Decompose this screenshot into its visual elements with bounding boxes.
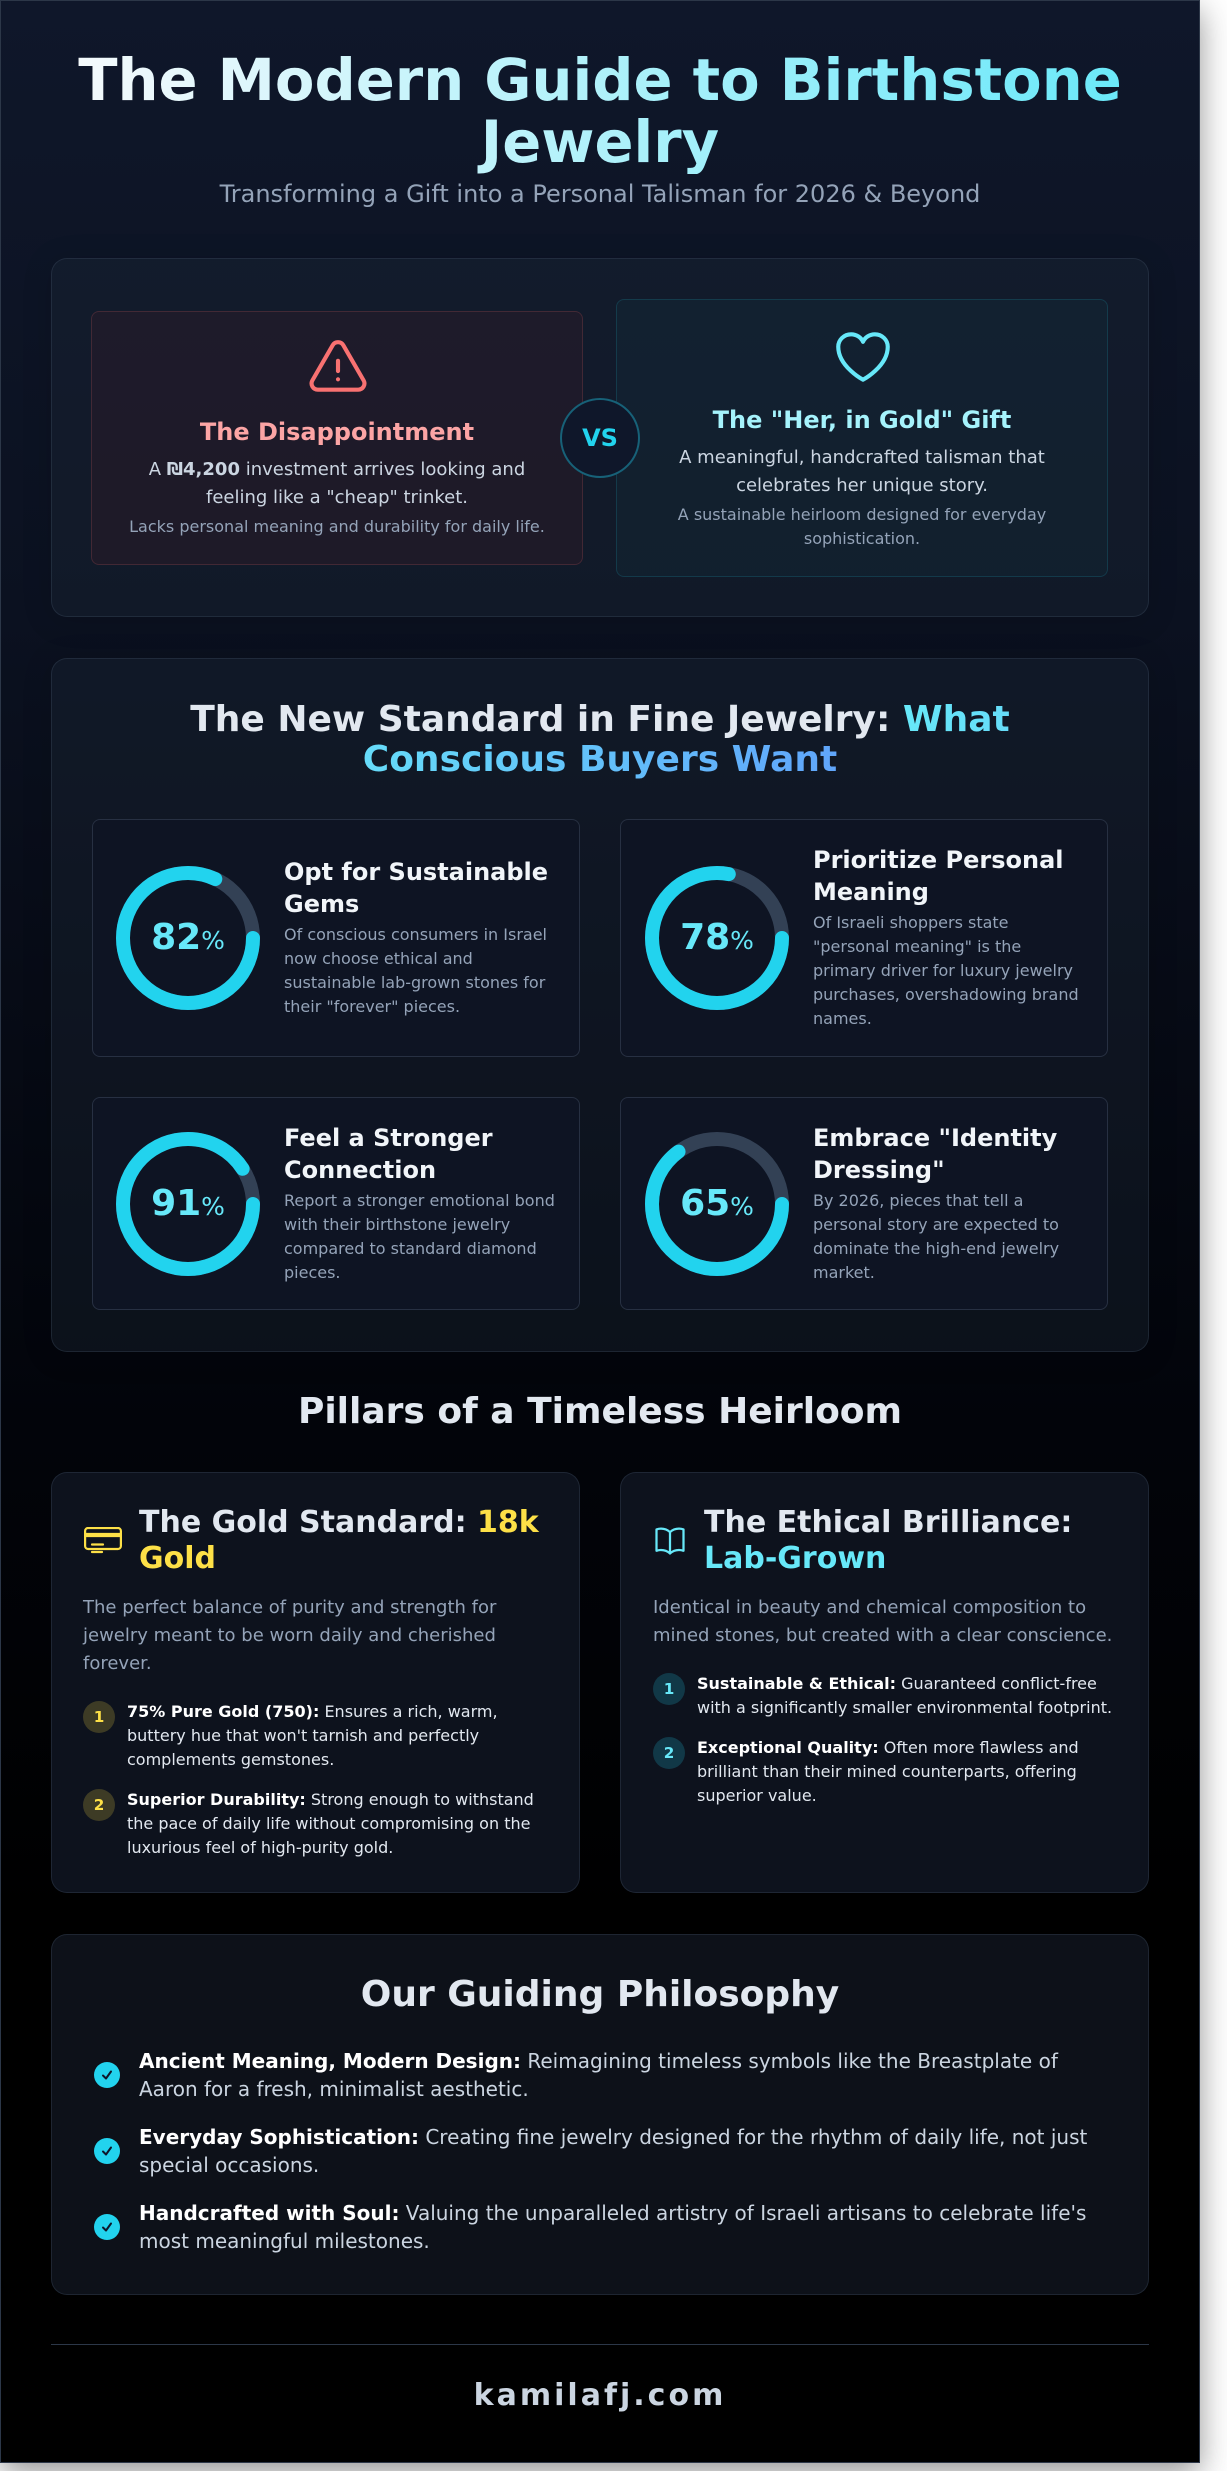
stat description: personal story are expected to bbox=[813, 1215, 1059, 1234]
item text: buttery hue that won't tarnish and perfectly bbox=[127, 1726, 479, 1745]
item text: the pace of daily life without compromising on the bbox=[127, 1814, 530, 1833]
card title: Lab-Grown bbox=[704, 1541, 886, 1576]
icon: open book bbox=[655, 1528, 685, 1555]
stat title bbox=[813, 846, 1064, 906]
stat title: Meaning bbox=[813, 878, 929, 906]
text: meaningful talisman: celebrates her unique story. bbox=[736, 475, 988, 496]
card description bbox=[82, 1597, 496, 1674]
card: the her in gold gift bbox=[616, 299, 1108, 577]
card title: The Gold Standard: 18k bbox=[139, 1505, 539, 1540]
stat description: "personal meaning" is the bbox=[813, 937, 1021, 956]
item text: Superior Durability: Strong enough to withstand bbox=[127, 1790, 534, 1809]
title bbox=[50, 50, 1150, 174]
panel: ethical brilliance bbox=[620, 1472, 1149, 1893]
stat description: primary driver for luxury jewelry bbox=[813, 961, 1073, 980]
stat description: their "forever" pieces. bbox=[284, 997, 460, 1016]
stat title: Feel a Stronger bbox=[284, 1124, 493, 1152]
panel: comparison bbox=[51, 258, 1149, 617]
item text: brilliant than their mined counterparts, offering bbox=[697, 1762, 1077, 1781]
stat description: names. bbox=[813, 1009, 872, 1028]
text: investment: feeling like a "cheap" trinket. bbox=[206, 487, 468, 508]
stat description: pieces. bbox=[284, 1263, 341, 1282]
stat description: By 2026, pieces that tell a bbox=[813, 1191, 1023, 1210]
heading: new standard: Conscious Buyers Want bbox=[363, 739, 837, 780]
item text: with a significantly smaller environmental footprint. bbox=[697, 1698, 1112, 1717]
item text bbox=[127, 1790, 534, 1857]
text: meaningful talisman: A meaningful, handcrafted talisman that bbox=[679, 447, 1045, 468]
stat description: Report a stronger emotional bond bbox=[284, 1191, 555, 1210]
ring chart: 91%: 91% bbox=[151, 1183, 225, 1224]
card: the disappointment bbox=[91, 311, 583, 565]
badge: vs: VS bbox=[582, 424, 618, 452]
text: lacks meaning: Lacks personal meaning and durability for daily life. bbox=[129, 517, 545, 536]
panel: new standard bbox=[51, 658, 1149, 1352]
ring chart: 78%: 78% bbox=[680, 917, 754, 958]
item text: Ancient Meaning, Modern Design: Reimagining timeless symbols like the Breastplate of bbox=[139, 2049, 1058, 2073]
item text: Everyday Sophistication: Creating fine jewelry designed for the rhythm of daily life, not just bbox=[139, 2125, 1087, 2149]
icon: warning triangle bbox=[309, 340, 367, 392]
stat title: Embrace "Identity bbox=[813, 1124, 1057, 1152]
item text bbox=[697, 1674, 1112, 1717]
stat description: market. bbox=[813, 1263, 875, 1282]
item text: superior value. bbox=[697, 1786, 817, 1805]
ring chart: 91% bbox=[116, 1132, 260, 1276]
text: investment: A ₪4,200 investment arrives looking and bbox=[149, 459, 525, 480]
stat description bbox=[813, 1191, 1059, 1282]
icon: heart bbox=[836, 332, 890, 382]
stat description bbox=[284, 1191, 555, 1282]
text: sustainable heirloom: sophistication. bbox=[804, 529, 920, 548]
text: sustainable heirloom bbox=[678, 505, 1046, 548]
text: sustainable heirloom: A sustainable heirloom designed for everyday bbox=[678, 505, 1046, 524]
card description: forever. bbox=[83, 1653, 152, 1674]
item text bbox=[127, 1702, 498, 1769]
subtitle: Transforming a Gift into a Personal Talisman for 2026 & Beyond bbox=[220, 180, 980, 208]
stat card: 82% bbox=[92, 819, 580, 1057]
stat description: Of conscious consumers in Israel bbox=[284, 925, 547, 944]
card description bbox=[653, 1597, 1112, 1646]
heading: her in gold: The "Her, in Gold" Gift bbox=[713, 406, 1011, 434]
item text bbox=[139, 2125, 1087, 2177]
stat description: dominate the high-end jewelry bbox=[813, 1239, 1059, 1258]
stat description bbox=[813, 913, 1079, 1028]
card description: mined stones, but created with a clear conscience. bbox=[653, 1625, 1112, 1646]
number badge: 2 bbox=[664, 1744, 674, 1762]
stat description: Of Israeli shoppers state bbox=[813, 913, 1009, 932]
card description: Identical in beauty and chemical composition to bbox=[653, 1597, 1086, 1618]
stat card: 78% bbox=[620, 819, 1108, 1057]
list item 2 bbox=[653, 1737, 1079, 1805]
heading: new standard bbox=[190, 699, 1010, 780]
title: Jewelry bbox=[481, 109, 719, 176]
item text: 75% Pure Gold (750): Ensures a rich, warm, bbox=[127, 1702, 498, 1721]
card title bbox=[704, 1505, 1072, 1576]
item text bbox=[139, 2049, 1058, 2101]
icon: credit card bbox=[84, 1527, 122, 1554]
number badge: 1 bbox=[94, 1708, 104, 1726]
item text bbox=[139, 2201, 1086, 2253]
item text: Exceptional Quality: Often more flawless and bbox=[697, 1738, 1079, 1757]
item text: luxurious feel of high-purity gold. bbox=[127, 1838, 393, 1857]
number badge bbox=[83, 1701, 115, 1733]
heading: the disappointment: The Disappointment bbox=[200, 418, 474, 446]
panel: guiding philosophy bbox=[51, 1934, 1149, 2295]
philosophy item 1 bbox=[94, 2049, 1058, 2101]
stat description: with their birthstone jewelry bbox=[284, 1215, 510, 1234]
item text: Aaron for a fresh, minimalist aesthetic. bbox=[139, 2077, 529, 2101]
heading: pillars: Pillars of a Timeless Heirloom bbox=[298, 1391, 902, 1432]
panel: gold standard bbox=[51, 1472, 580, 1893]
item text: most meaningful milestones. bbox=[139, 2229, 430, 2253]
stat title bbox=[284, 1124, 493, 1184]
footer: website: kamilafj.com bbox=[474, 2378, 726, 2413]
text: meaningful talisman bbox=[679, 447, 1045, 496]
stat description: now choose ethical and bbox=[284, 949, 473, 968]
number badge bbox=[653, 1737, 685, 1769]
number badge bbox=[653, 1673, 685, 1705]
card title: The Ethical Brilliance: bbox=[704, 1505, 1072, 1540]
card description: jewelry meant to be worn daily and cherished bbox=[83, 1625, 496, 1646]
stat title: Opt for Sustainable bbox=[284, 858, 548, 886]
list item 1 bbox=[653, 1673, 1112, 1717]
heading: new standard: The New Standard in Fine Jewelry: What bbox=[190, 699, 1010, 740]
icon: check bbox=[94, 2138, 120, 2164]
philosophy item 2 bbox=[94, 2125, 1087, 2177]
item text: Sustainable & Ethical: Guaranteed conflict-free bbox=[697, 1674, 1097, 1693]
ring chart: 78% bbox=[645, 866, 789, 1010]
stat title bbox=[813, 1124, 1057, 1184]
item text: Handcrafted with Soul: Valuing the unparalleled artistry of Israeli artisans to celebrate life's bbox=[139, 2201, 1086, 2225]
ring chart: 82%: 82% bbox=[151, 917, 225, 958]
ring chart: 65% bbox=[645, 1132, 789, 1276]
card description: The perfect balance of purity and strength for bbox=[83, 1597, 496, 1618]
ring chart: 65%: 65% bbox=[680, 1183, 754, 1224]
stat description: compared to standard diamond bbox=[284, 1239, 537, 1258]
item text: complements gemstones. bbox=[127, 1750, 334, 1769]
stat card: 65% bbox=[620, 1097, 1108, 1310]
number badge bbox=[83, 1789, 115, 1821]
stat description: sustainable lab-grown stones for bbox=[284, 973, 545, 992]
number badge: 1 bbox=[664, 1680, 674, 1698]
card title bbox=[139, 1505, 540, 1576]
badge: vs bbox=[560, 398, 640, 478]
stat description bbox=[284, 925, 547, 1016]
stat title: Dressing" bbox=[813, 1156, 945, 1184]
card title: Gold bbox=[139, 1541, 216, 1576]
philosophy item 3 bbox=[94, 2201, 1086, 2253]
heading: philosophy: Our Guiding Philosophy bbox=[361, 1974, 839, 2015]
list item 1 bbox=[83, 1701, 498, 1769]
stat card: 91% bbox=[92, 1097, 580, 1310]
stat title: Gems bbox=[284, 890, 359, 918]
stat description: purchases, overshadowing brand bbox=[813, 985, 1079, 1004]
text: investment bbox=[148, 459, 525, 508]
ring chart: 82% bbox=[116, 866, 260, 1010]
stat title: Prioritize Personal bbox=[813, 846, 1064, 874]
stat title bbox=[284, 858, 548, 918]
item text bbox=[697, 1738, 1079, 1805]
item text: special occasions. bbox=[139, 2153, 319, 2177]
icon: check bbox=[94, 2062, 120, 2088]
list item 2 bbox=[83, 1789, 534, 1857]
title: The Modern Guide to Birthstone bbox=[78, 47, 1122, 114]
icon: check bbox=[94, 2214, 120, 2240]
number badge: 2 bbox=[94, 1796, 104, 1814]
stat title: Connection bbox=[284, 1156, 436, 1184]
